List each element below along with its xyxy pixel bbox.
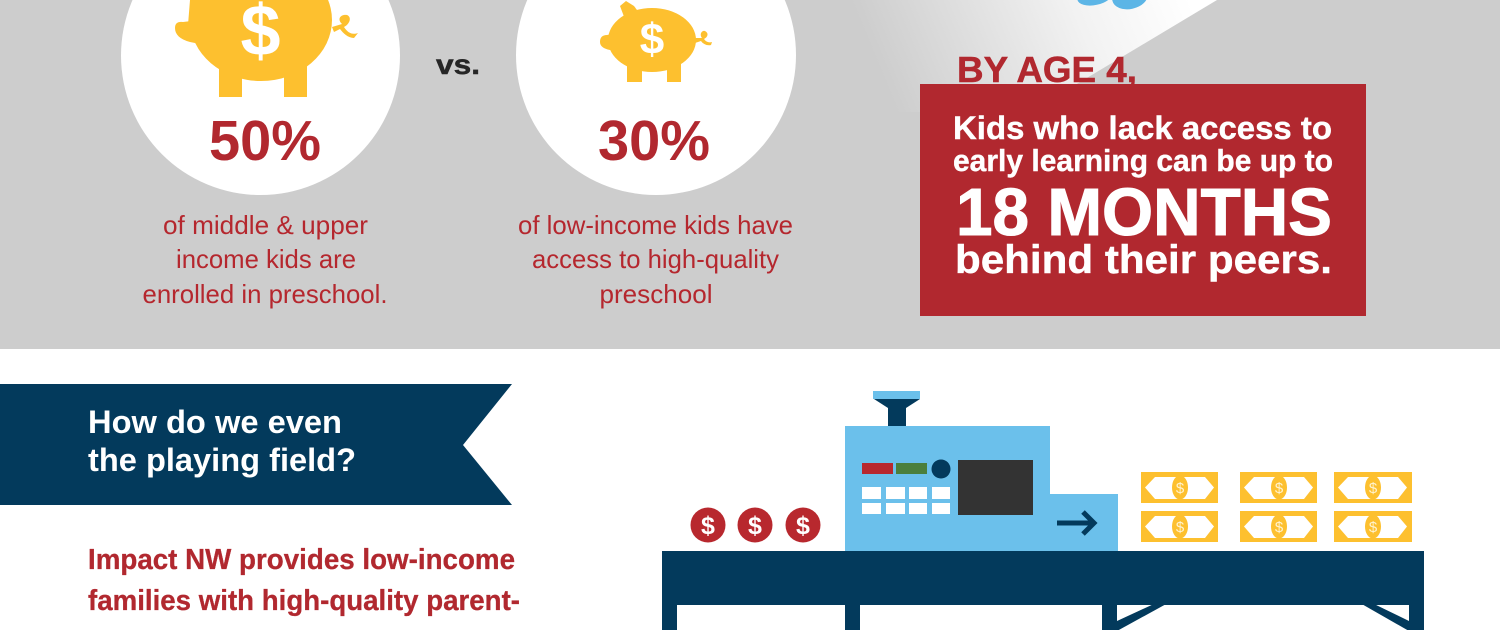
callout: 18 months behind: 18 MONTHS [956, 175, 1332, 250]
icon: small piggy bank: $ [640, 15, 664, 64]
icon: large piggy bank [175, 0, 358, 97]
caption: middle and upper income: enrolled in preschool. [142, 279, 388, 309]
machine body [845, 391, 1118, 551]
caption: middle and upper income [142, 210, 388, 309]
bills output: $ [1369, 519, 1378, 536]
label: by age 4: BY AGE 4, [957, 49, 1137, 90]
text block: impact nw: families with high-quality parent- [88, 585, 520, 617]
caption: low-income kids: access to high-quality [532, 244, 779, 274]
text block: impact nw: Impact NW provides low-income [88, 544, 515, 576]
banner: how do we even the playing field: the playing field? [88, 442, 356, 478]
conveyor table [662, 551, 1424, 630]
bills output: $ [1275, 480, 1284, 497]
callout: 18 months behind: behind their peers. [955, 238, 1332, 282]
coins input: $ [748, 512, 762, 540]
text block: impact nw [88, 544, 520, 617]
circle stat: 50 percent [121, 0, 400, 195]
illustration: money machine [662, 391, 1424, 630]
screen [958, 460, 1033, 515]
stat: 30%: 30% [598, 109, 710, 173]
caption: low-income kids [518, 210, 793, 309]
banner: how do we even the playing field [0, 384, 512, 505]
stat: 50%: 50% [209, 109, 321, 173]
panel: access gap [0, 0, 1500, 349]
icon: blue shape cropped at top [1076, 0, 1150, 12]
caption: low-income kids: of low-income kids have [518, 210, 793, 240]
coins input [690, 508, 820, 542]
callout: 18 months behind: Kids who lack access to [953, 110, 1332, 146]
icon: small piggy bank [600, 1, 712, 82]
spotlight beam [820, 0, 1217, 112]
caption: middle and upper income: of middle & upper [163, 210, 368, 240]
label: vs.: vs. [436, 49, 480, 80]
bills output: $ [1176, 519, 1185, 536]
bills output: $ [1176, 480, 1185, 497]
arrow [1057, 512, 1094, 534]
bills output: $ [1275, 519, 1284, 536]
banner: how do we even the playing field: How do we even [88, 404, 342, 440]
bills output [1141, 472, 1412, 542]
coins input: $ [796, 512, 810, 540]
bills output: $ [1369, 480, 1378, 497]
callout: 18 months behind [920, 84, 1366, 316]
callout: 18 months behind: early learning can be up to [953, 143, 1333, 178]
coins input: $ [701, 512, 715, 540]
caption: middle and upper income: income kids are [176, 244, 356, 274]
hopper [873, 391, 920, 426]
caption: low-income kids: preschool [600, 279, 712, 309]
control panel [862, 460, 950, 514]
circle stat: 30 percent [516, 0, 796, 195]
